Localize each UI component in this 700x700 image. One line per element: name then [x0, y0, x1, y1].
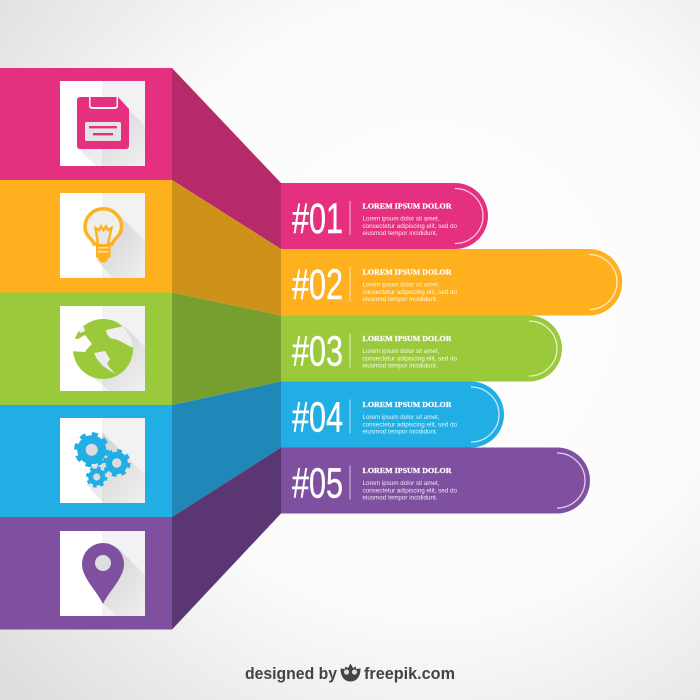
band: pink [0, 68, 281, 249]
tab 01: consectetur adipiscing elit, sed do [362, 223, 458, 230]
tab 04: Lorem ipsum dolor sit amet, [362, 414, 440, 421]
tab 05: eiusmod tempor incididunt. [362, 494, 438, 502]
tab 04 [281, 382, 504, 448]
tab 05: #05 [292, 460, 343, 508]
tab 05: Lorem ipsum dolor sit amet, [362, 480, 440, 487]
tab 04: consectetur adipiscing elit, sed do [362, 422, 458, 428]
tab 03: consectetur adipiscing elit, sed do [362, 356, 458, 362]
tab 02: consectetur adipiscing elit, sed do [362, 289, 458, 296]
icon: globe [60, 306, 145, 391]
icon: floppy disk [60, 81, 145, 166]
tab 04: #04 [292, 394, 343, 442]
footer credit: freepik.com [364, 665, 455, 683]
icon: gears [60, 418, 145, 503]
tab 01: #01 [292, 195, 343, 243]
band: green [0, 292, 281, 405]
footer credit: designed by [245, 665, 338, 683]
icon: light bulb [60, 193, 145, 278]
tab 03 [281, 316, 562, 382]
tab 02 [281, 249, 622, 316]
tab 03: eiusmod tempor incididunt. [362, 362, 438, 370]
tab 04: eiusmod tempor incididunt. [362, 428, 438, 436]
footer credit [245, 664, 455, 683]
band: orange [0, 180, 281, 316]
tab 03: #03 [292, 328, 343, 376]
tab 05 [281, 448, 590, 514]
tab 01: Lorem ipsum dolor sit amet, [362, 216, 440, 222]
band: blue [0, 382, 281, 517]
tab 02: Lorem ipsum dolor sit amet, [362, 282, 440, 288]
tab 05: LOREM IPSUM DOLOR [362, 466, 452, 475]
tab 01: eiusmod tempor incididunt. [362, 230, 438, 237]
icon: location pin [60, 531, 145, 616]
tab 02: LOREM IPSUM DOLOR [362, 268, 452, 276]
band: purple [0, 448, 281, 630]
tab 05: consectetur adipiscing elit, sed do [362, 488, 458, 494]
tab 03: Lorem ipsum dolor sit amet, [362, 348, 440, 355]
tab 01 [281, 183, 488, 249]
tab 02: #02 [292, 261, 343, 309]
tab 01: LOREM IPSUM DOLOR [362, 202, 452, 210]
tab 02: eiusmod tempor incididunt. [362, 296, 438, 303]
tab 03: LOREM IPSUM DOLOR [362, 334, 452, 343]
tab 04: LOREM IPSUM DOLOR [362, 400, 452, 409]
